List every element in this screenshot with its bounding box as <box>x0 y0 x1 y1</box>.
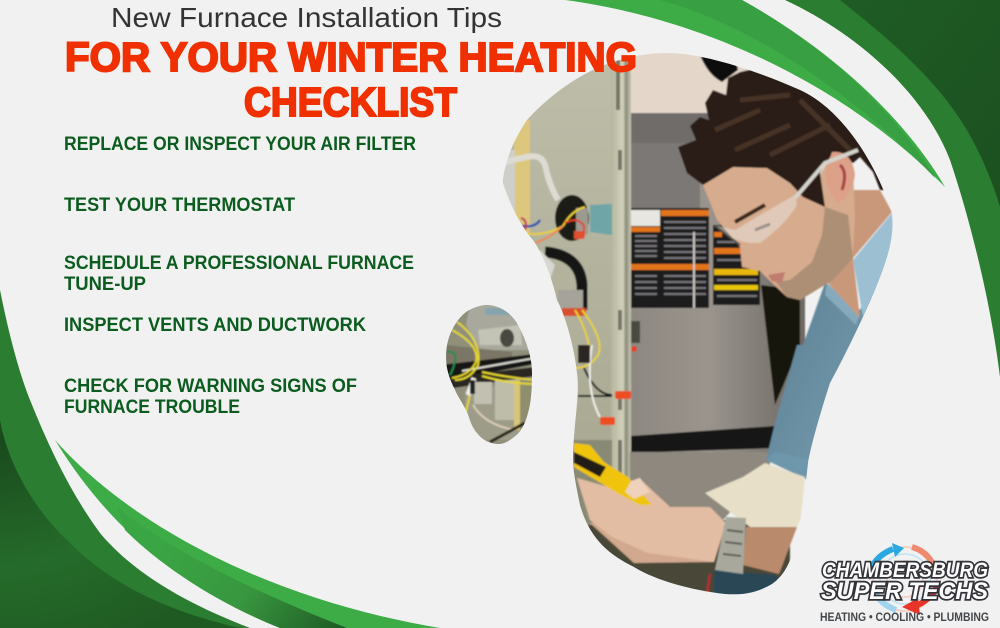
swoosh: bottom left green <box>0 290 440 628</box>
pressure switch <box>555 195 589 241</box>
item: vents: INSPECT VENTS AND DUCTWORK <box>64 315 366 336</box>
hand <box>577 478 726 562</box>
forearm <box>743 527 797 574</box>
top dark hose <box>700 55 738 82</box>
tan wire and bottom wires <box>473 405 515 430</box>
title: CHECKLIST <box>244 79 457 125</box>
lower interior <box>465 386 520 440</box>
man's face <box>703 153 855 300</box>
jeans <box>714 570 778 594</box>
warning labels <box>631 208 760 308</box>
item: warning signs: CHECK FOR WARNING SIGNS OF <box>64 376 357 397</box>
other arm <box>590 520 714 563</box>
furnace tank <box>630 166 806 453</box>
item: thermostat: TEST YOUR THERMOSTAT <box>64 195 295 216</box>
checklist <box>64 134 416 418</box>
logo <box>820 543 989 624</box>
man's neck <box>828 190 892 318</box>
watch <box>715 517 746 574</box>
ear <box>826 152 855 203</box>
item: warning signs <box>64 376 357 418</box>
dark gap behind man <box>761 285 800 405</box>
wall behind the furnace <box>630 53 751 114</box>
man's hair <box>678 65 885 207</box>
tank black band <box>630 426 775 453</box>
logo: circular arrows <box>870 547 937 611</box>
title: FOR YOUR WINTER HEATING <box>65 34 637 80</box>
main photo: technician at furnace <box>495 50 900 600</box>
bar switch <box>631 321 640 343</box>
item: tune-up <box>64 253 414 295</box>
thumb <box>625 478 650 499</box>
yellow multimeter <box>574 443 652 505</box>
shirt body <box>766 284 876 480</box>
logo: wordmark <box>821 559 988 605</box>
shirt collar <box>853 213 895 317</box>
item: air filter: REPLACE OR INSPECT YOUR AIR FILTER <box>64 134 416 155</box>
metal bracket <box>466 305 530 350</box>
white tube <box>505 156 558 200</box>
black pipes <box>545 252 582 310</box>
inset photo: furnace wiring <box>446 305 532 444</box>
item: warning signs: FURNACE TROUBLE <box>64 397 240 418</box>
vertical metal bar <box>611 50 631 520</box>
item: tune-up: TUNE-UP <box>64 274 146 295</box>
white undersleeve <box>705 463 805 527</box>
yellow wires <box>452 330 476 378</box>
lips <box>768 272 785 283</box>
logo: wordmark: SUPER TECHS <box>821 578 988 605</box>
furnace left panel <box>503 64 612 441</box>
title <box>65 34 637 125</box>
green wire <box>446 352 456 375</box>
wiring bundle <box>520 226 563 234</box>
bottom dark area <box>588 519 792 593</box>
subtitle: New Furnace Installation Tips <box>111 2 502 33</box>
black pipe <box>446 354 532 378</box>
hair highlights <box>715 95 850 155</box>
stubble <box>776 207 853 300</box>
wire nuts <box>615 391 631 399</box>
eyebrow and eye <box>735 205 765 222</box>
cuff <box>768 453 786 466</box>
safety glasses <box>714 195 797 243</box>
item: tune-up: SCHEDULE A PROFESSIONAL FURNACE <box>64 253 414 274</box>
logo: wordmark: CHAMBERSBURG <box>822 559 988 582</box>
swoosh: top right green <box>565 0 1000 377</box>
